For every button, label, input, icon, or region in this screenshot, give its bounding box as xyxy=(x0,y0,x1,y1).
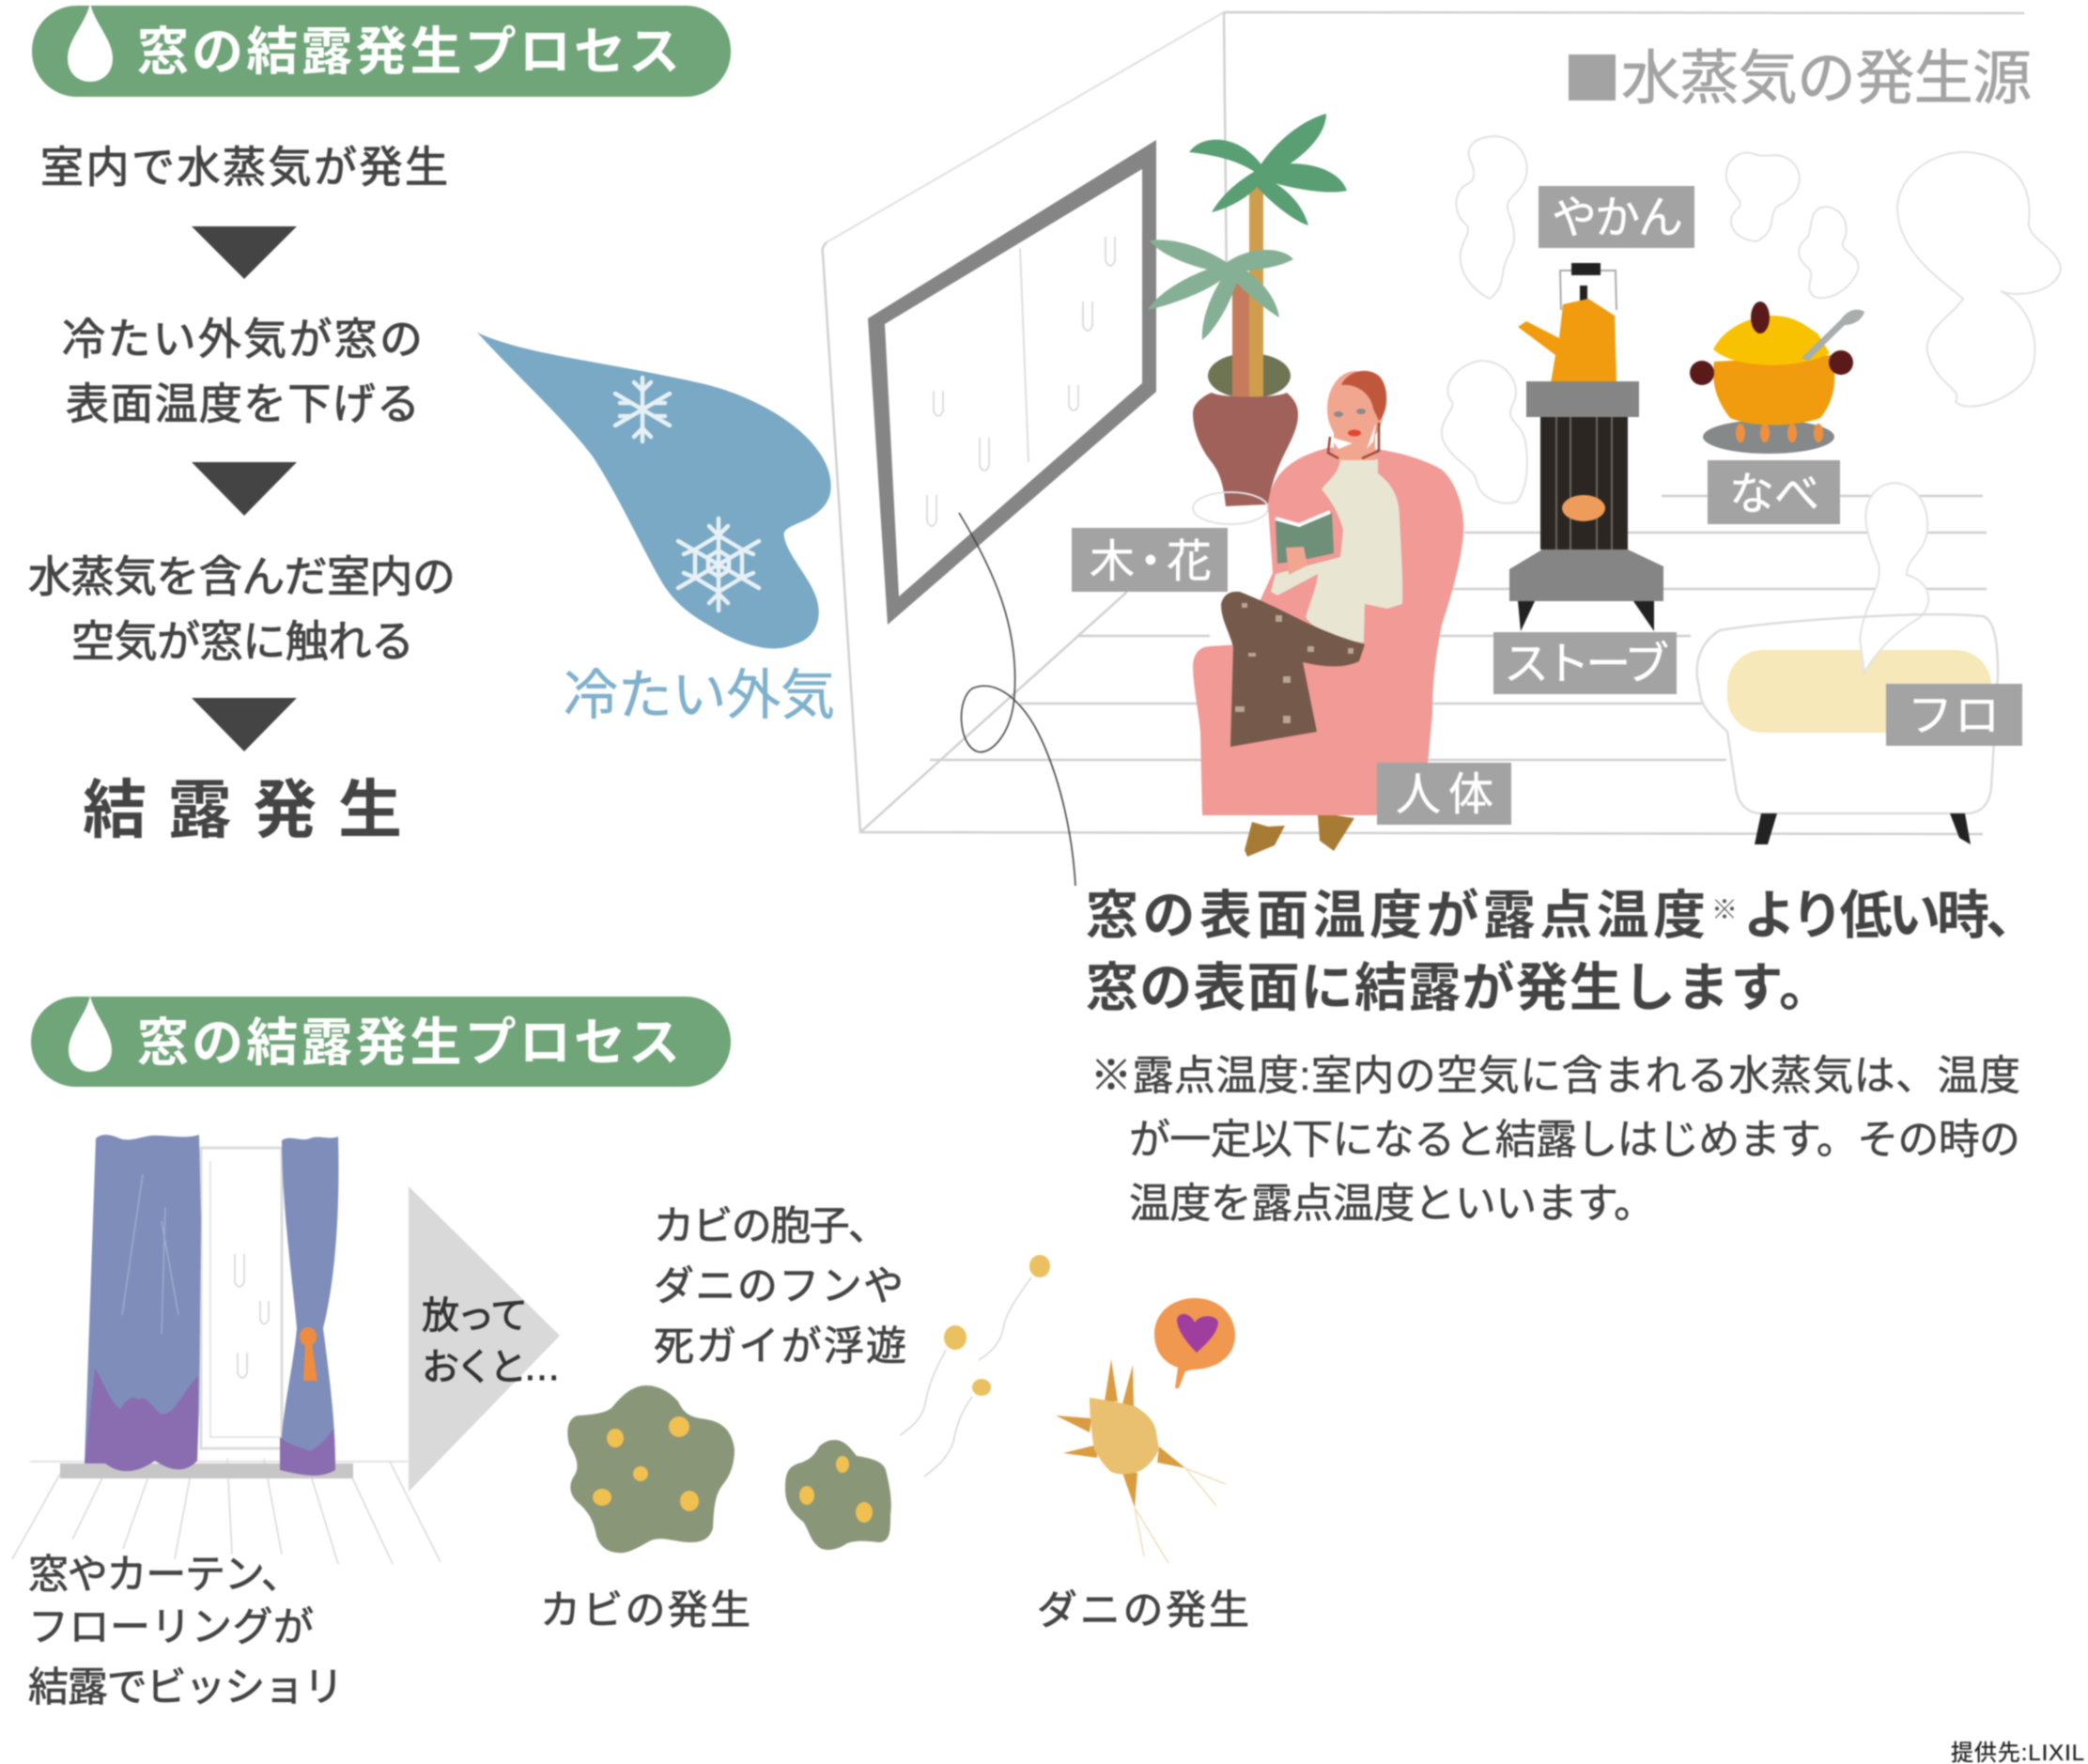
icon: heart speech bubble xyxy=(1154,1298,1235,1388)
footnote: dew point: 温度を露点温度といいます。 xyxy=(1129,1181,1655,1227)
tag: tree and flowers: 木・花 xyxy=(1090,537,1212,587)
heading: process pill top xyxy=(32,3,731,97)
stove legs xyxy=(1518,601,1654,631)
armchair xyxy=(1193,447,1463,815)
plant trunk front xyxy=(1232,348,1263,400)
mite body xyxy=(1090,1398,1159,1474)
window and curtains illustration xyxy=(12,1135,441,1564)
spoon xyxy=(1802,310,1864,361)
step 3 text: 空気が窓に触れる xyxy=(71,617,414,666)
label: cold outside air: 冷たい外気 xyxy=(564,665,835,726)
tub water xyxy=(1727,650,1991,733)
step 2 text: 表面温度を下げる xyxy=(66,379,420,428)
slippers xyxy=(1245,815,1354,857)
hand xyxy=(1286,547,1307,575)
curtain right xyxy=(280,1137,338,1476)
skirt dots xyxy=(1235,603,1353,723)
flow: condensation steps xyxy=(28,143,456,846)
arrow triangle xyxy=(409,1186,560,1492)
pot knob xyxy=(1751,302,1770,333)
kettle xyxy=(1518,263,1616,383)
tag: pot xyxy=(1708,460,1840,524)
floor boards xyxy=(12,1459,441,1564)
kettle handle xyxy=(1560,271,1616,310)
window frame xyxy=(868,140,1156,625)
room outlines xyxy=(823,12,2024,834)
tub outline xyxy=(1697,614,1998,813)
icon: floating spores xyxy=(900,1255,1050,1477)
tag: bath: フロ xyxy=(1908,691,2000,741)
tag: tree and flowers xyxy=(1072,528,1228,592)
step 2 text: 冷たい外気が窓の xyxy=(62,315,423,364)
text: spores: ダニのフンや xyxy=(654,1264,904,1309)
pot lid xyxy=(1713,316,1830,365)
window xyxy=(201,1148,282,1448)
step 1 text: 室内で水蒸気が発生 xyxy=(40,143,448,192)
tag: stove: ストーブ xyxy=(1504,640,1669,689)
lips xyxy=(1348,430,1361,436)
neck xyxy=(1334,432,1375,460)
text: spores: カビの胞子、 xyxy=(654,1204,889,1249)
heading: process pill bottom xyxy=(31,996,731,1087)
arrow 1 xyxy=(192,226,297,279)
room illustration xyxy=(823,12,2061,857)
text: window wet xyxy=(28,1553,344,1710)
arrow 3 xyxy=(192,698,297,751)
tub legs xyxy=(1755,813,1971,844)
pot handles xyxy=(1690,350,1853,385)
pot on burner xyxy=(1690,302,1864,454)
plant pot xyxy=(1193,393,1298,506)
reading woman in armchair xyxy=(1193,371,1463,857)
curtain left xyxy=(85,1135,201,1471)
window mullion xyxy=(1020,248,1029,462)
palm leaves upper xyxy=(1189,114,1347,225)
text: if left alone xyxy=(422,1295,561,1388)
curtain tie xyxy=(300,1327,317,1381)
footnote: dew point xyxy=(1090,1053,2020,1227)
kettle cap xyxy=(1571,263,1601,275)
bathtub xyxy=(1697,483,1998,844)
step 2 text xyxy=(62,315,423,428)
hair xyxy=(1341,371,1386,421)
kettle body xyxy=(1518,299,1616,383)
footnote: dew point: が一定以下になると結露しはじめます。その時の xyxy=(1129,1117,2020,1163)
plant trunks xyxy=(1232,175,1263,400)
callout headline xyxy=(1086,886,2038,1017)
icon: snowflake small xyxy=(615,378,670,441)
plant xyxy=(1148,114,1347,524)
callout leader line xyxy=(959,513,1075,886)
icon: dust mite xyxy=(1056,1359,1226,1563)
floor shadow xyxy=(60,1463,353,1478)
tag: kettle xyxy=(1539,186,1694,248)
heading: process pill bottom: 窓の結露発生プロセス xyxy=(137,1014,680,1072)
burner xyxy=(1703,420,1834,454)
text: spores xyxy=(654,1204,906,1369)
footnote: dew point: ※露点温度:室内の空気に含まれる水蒸気は、温度 xyxy=(1090,1053,2020,1099)
text: spores: 死ガイが浮遊 xyxy=(654,1324,906,1369)
callout headline: より低い時、 xyxy=(1743,886,2038,945)
icon: mold large xyxy=(567,1385,735,1553)
saucer outline xyxy=(1193,492,1268,524)
face xyxy=(1327,371,1384,446)
text: if left alone: おくと… xyxy=(422,1347,561,1388)
step 4 result: 結露発生 xyxy=(83,775,402,846)
heading: sources of water vapour: 水蒸気の発生源 xyxy=(1621,46,2032,112)
stove stripes xyxy=(1556,417,1612,549)
icon: water drop xyxy=(69,996,112,1072)
steam clouds xyxy=(1442,136,2061,503)
heading: process pill top: 窓の結露発生プロセス xyxy=(137,23,680,81)
callout headline: ※ xyxy=(1711,895,1738,924)
text: window wet: 結露でビッショリ xyxy=(28,1665,344,1710)
callout headline: 窓の表面温度が露点温度 xyxy=(1086,886,1706,945)
collar and hair strands xyxy=(1328,423,1379,458)
icon: snowflake large xyxy=(678,518,759,611)
cold air blob xyxy=(477,333,831,648)
text: window wet: 窓やカーテン、 xyxy=(28,1553,302,1598)
eyes xyxy=(1334,409,1366,417)
arrow 2 xyxy=(192,462,297,516)
stove window xyxy=(1562,495,1605,521)
tag: human body xyxy=(1377,763,1511,825)
icon: water drop xyxy=(68,3,113,82)
palm leaves lower xyxy=(1148,240,1293,340)
bath steam xyxy=(1860,483,1928,673)
tag: bath xyxy=(1886,684,2022,746)
plant soil xyxy=(1208,353,1291,398)
flames xyxy=(1736,424,1823,442)
callout headline: 窓の表面に結露が発生します。 xyxy=(1086,958,1832,1017)
window droplets xyxy=(927,237,1115,526)
stove xyxy=(1509,381,1663,631)
text: mites occur: ダニの発生 xyxy=(1037,1588,1249,1633)
step 3 text: 水蒸気を含んだ室内の xyxy=(28,552,456,601)
heading square xyxy=(1569,54,1616,101)
tag: kettle: やかん xyxy=(1552,193,1683,243)
icon: mold small xyxy=(785,1440,891,1550)
skirt xyxy=(1221,592,1365,747)
text: mold occurs: カビの発生 xyxy=(540,1588,750,1633)
text: window wet: フローリングが xyxy=(28,1605,314,1650)
stove base xyxy=(1509,549,1663,601)
book xyxy=(1276,512,1334,564)
tag: pot: なべ xyxy=(1729,470,1819,519)
step 3 text xyxy=(28,552,456,666)
text: if left alone: 放って xyxy=(422,1295,528,1337)
tag: human body: 人体 xyxy=(1396,770,1493,820)
sweater xyxy=(1271,459,1402,642)
mite legs xyxy=(1056,1359,1185,1508)
pot body xyxy=(1713,355,1834,425)
mite hairs xyxy=(1135,1468,1226,1563)
